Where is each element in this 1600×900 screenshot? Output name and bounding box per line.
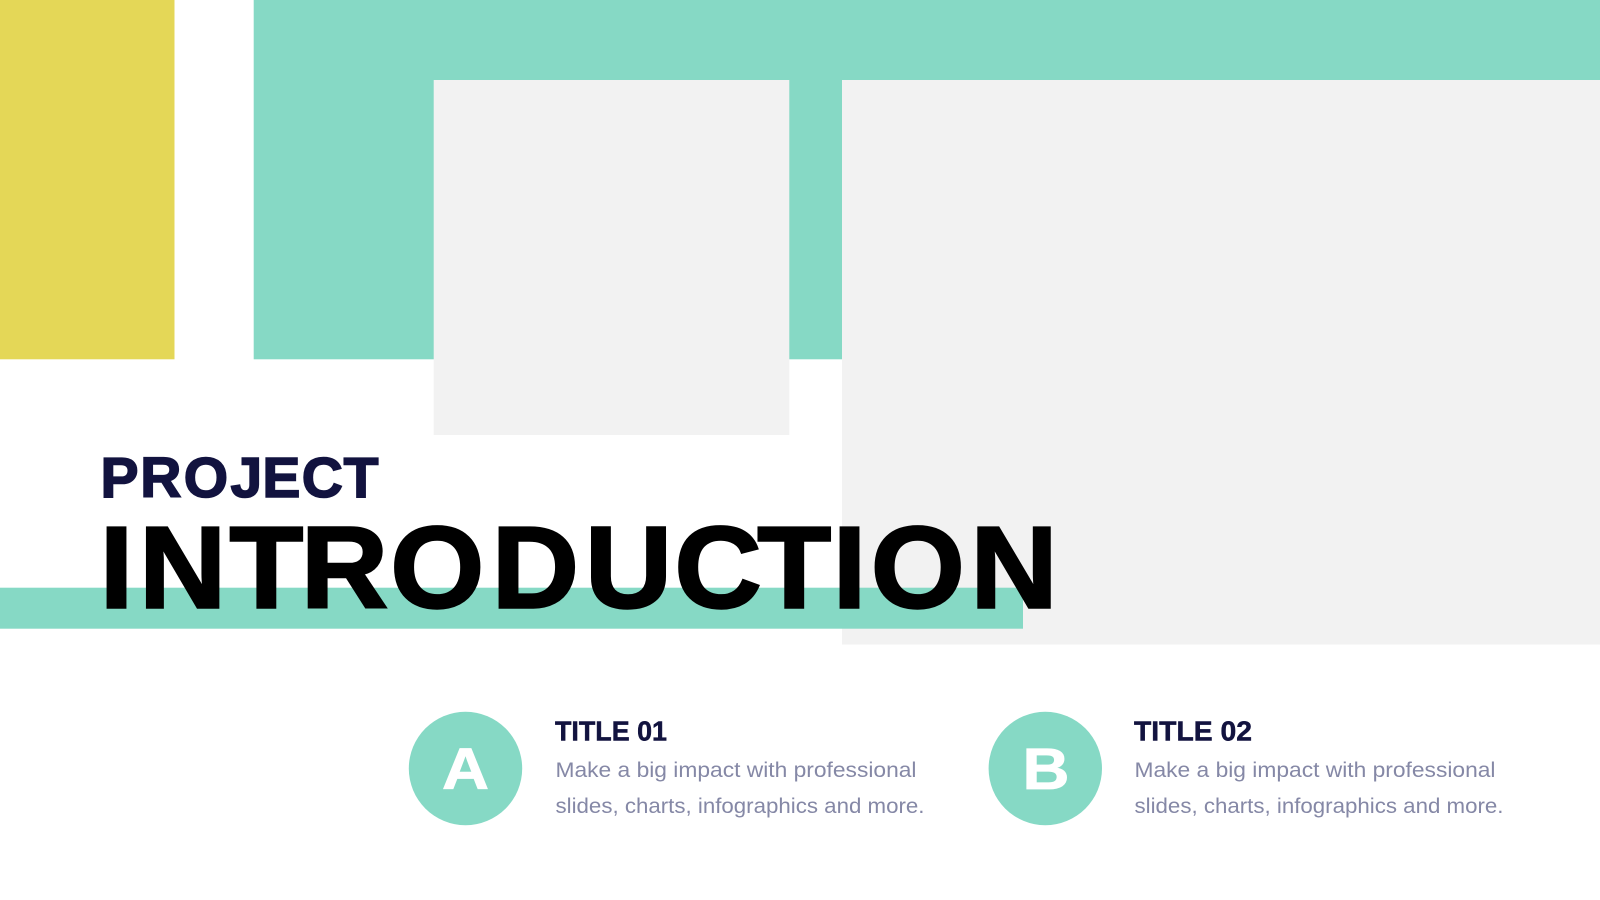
icon: circle A: A	[442, 737, 489, 802]
icon: circle B: B	[1022, 737, 1070, 802]
item A title: TITLE 01	[555, 716, 667, 747]
teal top block	[254, 0, 1600, 359]
icon: circle A	[409, 712, 522, 825]
title: INTRODUCTION: INTRODUCTION	[100, 504, 1058, 633]
item A description: Make a big impact with professional	[556, 758, 916, 782]
item B title: TITLE 02	[1134, 716, 1252, 747]
yellow block	[0, 0, 174, 359]
item B description: Make a big impact with professional	[1134, 758, 1496, 782]
item A description	[556, 758, 924, 818]
item A description: slides, charts, infographics and more.	[556, 794, 924, 818]
item A	[409, 712, 924, 825]
heading: PROJECT: PROJECT	[100, 446, 379, 510]
image placeholder: center	[434, 80, 789, 435]
teal title bar	[0, 588, 1023, 629]
item B	[989, 712, 1504, 825]
item B description: slides, charts, infographics and more.	[1134, 794, 1504, 818]
item B description	[1134, 758, 1504, 818]
image placeholder: large right	[842, 80, 1600, 644]
icon: circle B	[989, 712, 1102, 825]
